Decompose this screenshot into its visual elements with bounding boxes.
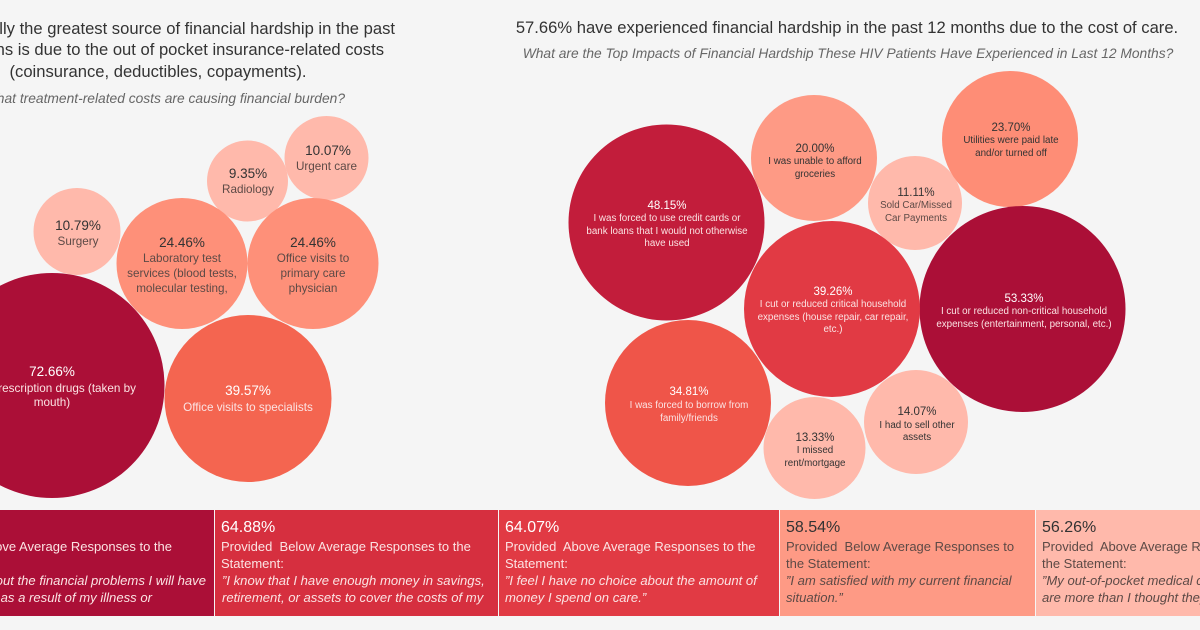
- statement card: 58.54% satisfied: [780, 510, 1035, 616]
- statement card: 64.07% no choice: [499, 510, 779, 616]
- bubble: missed rent: rent/mortgage: [784, 458, 846, 469]
- bubble: prescription drugs: [0, 273, 164, 498]
- statement card: 56.26% out-of-pocket: 56.26%: [1042, 519, 1096, 536]
- bubble: laboratory tests: 24.46%: [159, 235, 205, 250]
- statement card: 56.26% out-of-pocket: [1036, 510, 1200, 616]
- statement card: 64.07% no choice: money I spend on care.”: [505, 590, 647, 605]
- bubble: borrow from family: [605, 320, 771, 486]
- bubble: radiology: 9.35%: [229, 166, 267, 181]
- bubble: utilities: Utilities were paid late: [963, 135, 1059, 146]
- left heading: (coinsurance, deductibles, copayments).: [10, 62, 306, 81]
- statement card: 64.07% no choice: Provided Above Average Responses to the: [505, 539, 756, 554]
- statement card: 64.07% no choice: ”I feel I have no choice about the amount of: [505, 573, 758, 588]
- bubble: critical expenses: [744, 221, 920, 397]
- statement card: 58.54% satisfied: 58.54%: [786, 519, 840, 536]
- statement card: 56.26% out-of-pocket: the Statement:: [1042, 556, 1127, 571]
- bubble: utilities: 23.70%: [991, 122, 1031, 134]
- bubble: specialist visits: [164, 315, 332, 482]
- statement card: 64.07% no choice: 64.07%: [505, 519, 559, 536]
- statement card: 64.88% savings: Statement:: [221, 556, 284, 571]
- bubble: radiology: Radiology: [222, 183, 274, 196]
- statement card: 58.54% satisfied: situation.”: [786, 590, 843, 605]
- bubble: specialist visits: 39.57%: [225, 383, 271, 398]
- statement card: 64.88% savings: ”I know that I have enough money in savings,: [222, 573, 485, 588]
- bubble: credit cards: [568, 124, 764, 320]
- bubble: urgent care: [284, 116, 368, 200]
- bubble: sold car: Car Payments: [885, 213, 947, 224]
- statement card: 64.88% savings: Provided Below Average Responses to the: [221, 539, 471, 554]
- bubble: borrow from family: 34.81%: [669, 386, 709, 398]
- bubble: primary care visits: [248, 198, 378, 329]
- bubble: sold car: [868, 156, 962, 250]
- bubble: non-critical expenses: I cut or reduced non-critical household: [941, 306, 1107, 317]
- bubble: utilities: and/or turned off: [975, 148, 1047, 159]
- bubble: radiology: [207, 140, 288, 222]
- bubble: critical expenses: expenses (house repair, car repair,: [758, 312, 908, 323]
- bubble: groceries: [751, 95, 877, 221]
- statement card: 58.54% satisfied: the Statement:: [786, 556, 871, 571]
- bubble: sold assets: I had to sell other: [879, 420, 955, 431]
- right subtitle: What are the Top Impacts of Financial Hardship These HIV Patients Have Experienced in Last 12 Months?: [523, 46, 1174, 61]
- bubble: prescription drugs: mouth): [34, 396, 70, 409]
- bubble: specialist visits: Office visits to specialists: [183, 401, 313, 414]
- bubble: laboratory tests: services (blood tests,: [127, 267, 237, 280]
- bubble: groceries: groceries: [795, 169, 835, 180]
- bubble: groceries: I was unable to afford: [768, 156, 862, 167]
- bubble: prescription drugs: 72.66%: [29, 364, 75, 379]
- bubble: missed rent: 13.33%: [795, 432, 835, 444]
- bubble: primary care visits: Office visits to: [277, 252, 350, 265]
- bubble: surgery: Surgery: [58, 235, 99, 248]
- statement card: worry about financial problems: [0, 510, 214, 616]
- bubble: credit cards: have used: [644, 238, 690, 249]
- right heading: 57.66% have experienced financial hardship in the past 12 months due to the cost of care.: [516, 18, 1178, 37]
- bubble: credit cards: 48.15%: [647, 200, 687, 212]
- bubble chart: treatment-related costs: [0, 116, 378, 498]
- bubble: non-critical expenses: 53.33%: [1004, 293, 1044, 305]
- bubble: sold assets: 14.07%: [897, 406, 937, 418]
- statement card: worry about financial problems: as a result of my illness or: [1, 590, 153, 605]
- bubble: sold car: Sold Car/Missed: [880, 200, 952, 211]
- bubble: laboratory tests: [116, 198, 248, 329]
- bubble: groceries: 20.00%: [795, 143, 835, 155]
- bubble: primary care visits: physician: [289, 282, 337, 295]
- bubble: critical expenses: 39.26%: [813, 286, 853, 298]
- bubble: critical expenses: I cut or reduced critical household: [760, 299, 906, 310]
- statement card: 64.07% no choice: Statement:: [505, 556, 568, 571]
- bubble: surgery: 10.79%: [55, 218, 101, 233]
- left heading: [0, 19, 395, 81]
- bubble: utilities: [942, 71, 1078, 207]
- bubble: borrow from family: family/friends: [660, 413, 718, 424]
- statement card: 64.88% savings: 64.88%: [221, 519, 275, 536]
- statement strip: [0, 510, 1200, 616]
- bubble: surgery: [34, 188, 120, 275]
- bubble: sold assets: assets: [903, 432, 931, 443]
- bubble: missed rent: [764, 397, 866, 499]
- bubble: laboratory tests: molecular testing,: [136, 282, 228, 295]
- bubble: borrow from family: I was forced to borrow from: [630, 400, 748, 411]
- statement card: 64.88% savings: retirement, or assets to cover the costs of my: [222, 590, 485, 605]
- bubble chart: impacts of financial hardship: [568, 71, 1126, 499]
- statement card: 64.88% savings: [215, 510, 498, 616]
- bubble: urgent care: Urgent care: [296, 160, 357, 173]
- bubble: non-critical expenses: [920, 206, 1126, 412]
- bubble: sold assets: [864, 370, 968, 474]
- statement card: 58.54% satisfied: Provided Below Average Responses to: [786, 539, 1014, 554]
- bubble: primary care visits: primary care: [281, 267, 345, 280]
- bubble: laboratory tests: Laboratory test: [143, 252, 222, 265]
- bubble: critical expenses: etc.): [823, 324, 843, 335]
- bubble: urgent care: 10.07%: [305, 143, 351, 158]
- statement card: 58.54% satisfied: ”I am satisfied with my current financial: [786, 573, 1013, 588]
- bubble: credit cards: bank loans that I would not otherwise: [586, 226, 748, 237]
- bubble: non-critical expenses: expenses (entertainment, personal, etc.): [936, 319, 1112, 330]
- bubble: primary care visits: 24.46%: [290, 235, 336, 250]
- bubble: missed rent: I missed: [797, 445, 833, 456]
- bubble: sold car: 11.11%: [897, 187, 935, 199]
- bubble: credit cards: I was forced to use credit cards or: [593, 213, 741, 224]
